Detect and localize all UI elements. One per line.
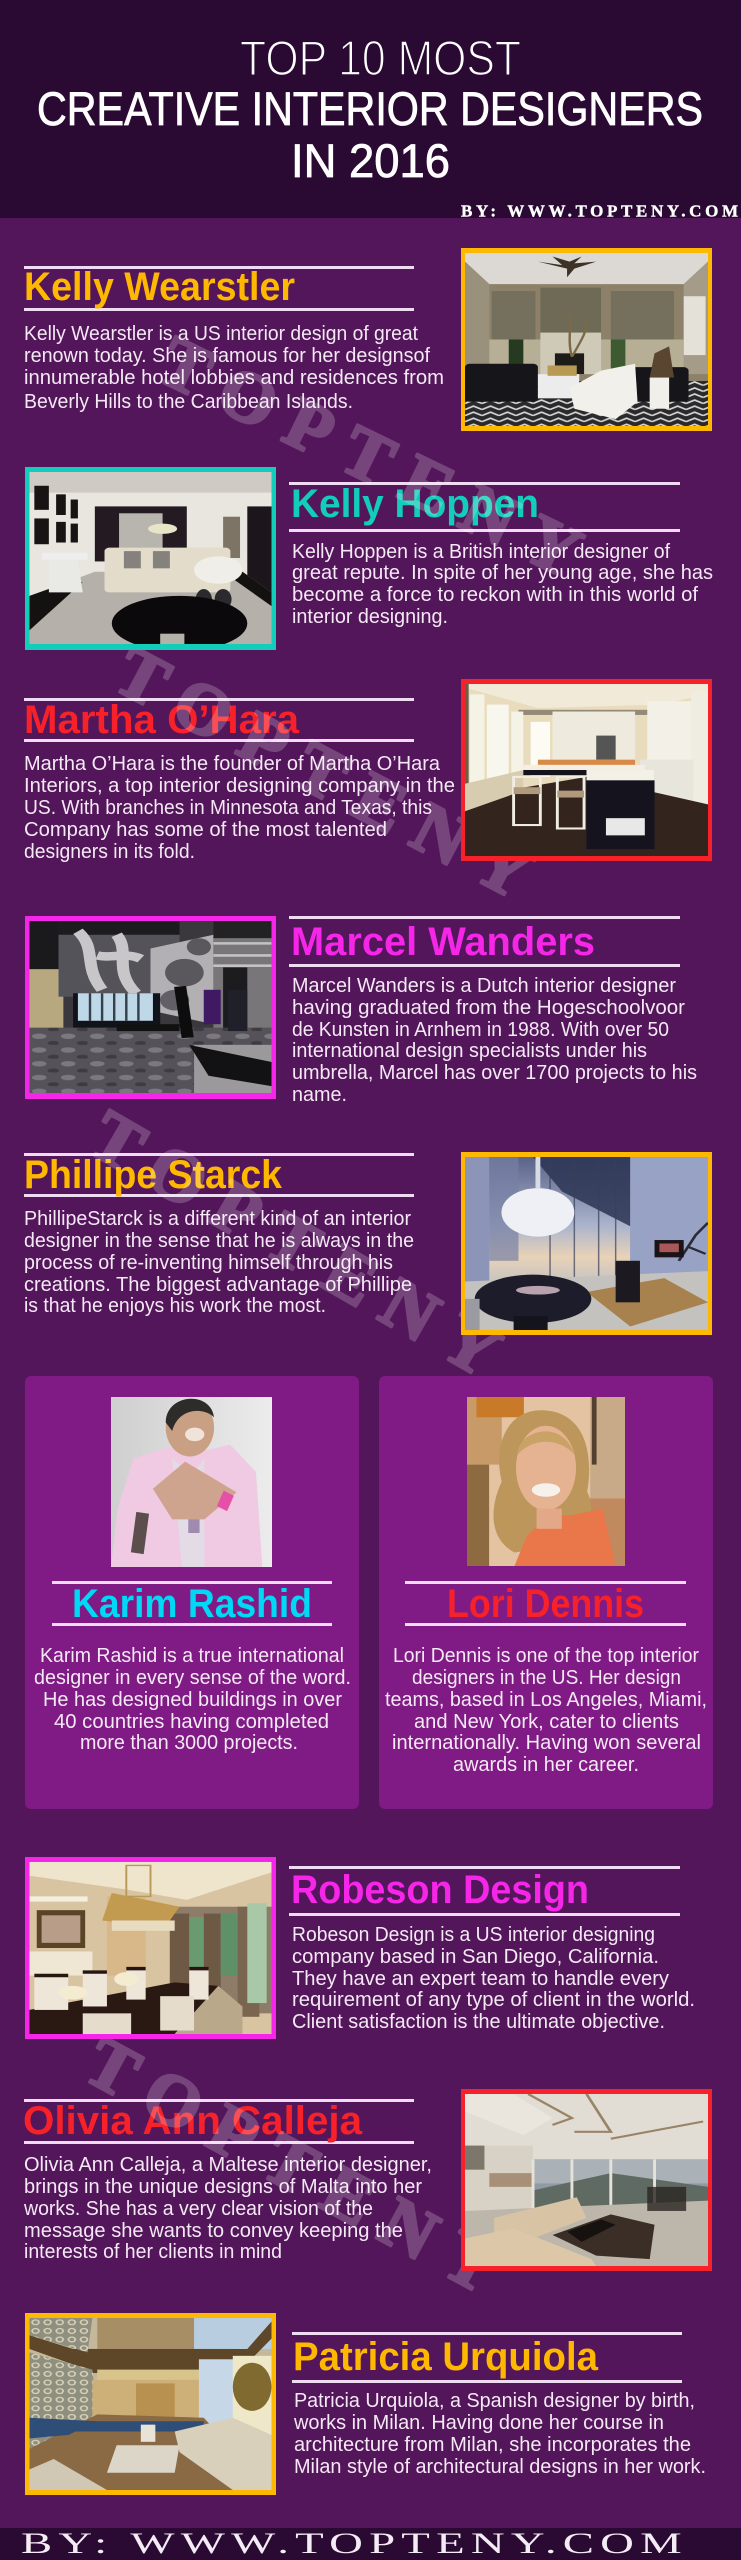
description: more than 3000 projects. [80,1731,298,1754]
description: interior designing. [292,605,448,628]
description: He has designed buildings in over [43,1688,342,1711]
photo: Marcel Wanders boutique [25,916,276,1099]
photo: Martha O'Hara kitchen [461,679,712,861]
entry: Phillipe Starck text [24,1153,414,1317]
entry: Kelly Hoppen text [289,482,713,628]
description: teams, based in Los Angeles, Miami, [385,1688,707,1711]
description [24,322,444,413]
description: works in Milan. Having done her course in [293,2411,664,2434]
description: company based in San Diego, California. [292,1945,659,1968]
description: brings in the unique designs of Malta into her [24,2175,422,2198]
description: Robeson Design is a US interior designing [292,1923,655,1946]
description: US. With branches in Minnesota and Texas, this [24,796,432,819]
entry: Patricia Urquiola text [292,2332,706,2478]
byline: BY: WWW.TOPTENY.COM [461,202,738,220]
description: They have an expert team to handle every [292,1967,670,1990]
description: Kelly Wearstler is a US interior design of great [24,322,418,345]
photo: Kelly Wearstler living room [461,248,712,431]
entry: Martha O'Hara text [24,698,455,863]
description [24,1207,414,1317]
description: renown today. She is famous for her designsof [24,344,430,367]
entry: Kelly Wearstler text [24,265,444,413]
name: Patricia Urquiola [293,2335,599,2379]
name: Martha O’Hara [24,698,300,742]
description: international design specialists under his [292,1039,647,1062]
description: Marcel Wanders is a Dutch interior designer [292,974,676,997]
description: designer in the sense that he is always in the [24,1229,414,1252]
description: Company has some of the most talented [24,818,387,841]
description: Beverly Hills to the Caribbean Islands. [24,390,353,413]
description: designers in the US. Her design [412,1666,681,1689]
description [292,540,713,628]
entry: Olivia Ann Calleja text [23,2099,432,2263]
description: internationally. Having won several [392,1731,701,1754]
name: Marcel Wanders [291,920,595,964]
description: designer in every sense of the word. [34,1666,351,1689]
portrait: Lori Dennis [467,1397,625,1566]
description: innumerable hotel lobbies and residences from [24,366,444,389]
description: is that he enjoys his work the most. [24,1294,326,1317]
name: Kelly Hoppen [291,482,539,526]
description: Olivia Ann Calleja, a Maltese interior designer, [24,2153,432,2176]
photo: Olivia Ann Calleja living room [461,2089,712,2271]
photo: Phillipe Starck dining room [461,1152,712,1335]
description: having graduated from the Hogeschoolvoor [292,996,685,1019]
description [292,1923,695,2033]
title line 3: IN 2016 [291,134,450,187]
description: PhillipeStarck is a different kind of an interior [24,1207,411,1230]
description: process of re-inventing himself through his [24,1251,393,1274]
description: Interiors, a top interior designing company in the [24,774,455,797]
description: Karim Rashid is a true international [40,1644,344,1667]
description: awards in her career. [453,1753,639,1776]
name: Kelly Wearstler [24,265,295,309]
photo: Kelly Hoppen lounge [25,467,276,651]
entry: Marcel Wanders text [289,916,697,1106]
description: Martha O’Hara is the founder of Martha O’Hara [24,752,441,775]
description [23,2153,432,2263]
description: architecture from Milan, she incorporates the [294,2433,691,2456]
description: become a force to reckon with in this world of [292,583,698,606]
description: message she wants to convey keeping the [24,2219,403,2242]
description: de Kunsten in Arnhem in 1988. With over 50 [292,1018,669,1041]
description: requirement of any type of client in the world. [292,1988,695,2011]
photo: Patricia Urquiola lounge [25,2313,276,2495]
name: Phillipe Starck [24,1153,283,1197]
description: Lori Dennis is one of the top interior [393,1644,699,1667]
description: umbrella, Marcel has over 1700 projects to his [292,1061,697,1084]
card: Lori Dennis [379,1376,713,1809]
card: Karim Rashid [25,1376,359,1809]
rules and name: Karim Rashid [72,1582,312,1626]
description: great repute. In spite of her young age, she has [292,561,713,584]
header banner [0,0,741,220]
watermark: TOPTENY 2: TOPTENY [103,630,545,915]
description: works. She has a very clear vision of the [23,2197,373,2220]
description [24,752,455,863]
description: Client satisfaction is the ultimate objective. [292,2010,665,2033]
footer banner [0,2527,741,2560]
footer byline: BY: WWW.TOPTENY.COM [21,2527,688,2560]
photo: Robeson Design dining room [25,1857,276,2039]
description: Milan style of architectural designs in her work. [294,2455,706,2478]
description: 40 countries having completed [54,1710,329,1733]
rules and name: Lori Dennis [447,1582,644,1626]
watermark: TOPTENY 4: TOPTENY [72,2021,513,2310]
name: Robeson Design [291,1868,589,1912]
description: Kelly Hoppen is a British interior designer of [292,540,670,563]
description [34,1644,351,1754]
description: designers in its fold. [24,840,195,863]
title line 1: TOP 10 MOST [240,32,521,86]
description: creations. The biggest advantage of Phillipe [24,1273,412,1296]
name: Olivia Ann Calleja [23,2099,363,2143]
entry: Robeson Design text [289,1866,695,2033]
watermark: TOPTENY 1: TOPTENY [147,320,594,593]
description [385,1644,707,1776]
portrait: Karim Rashid [111,1397,272,1567]
description: and New York, cater to clients [414,1710,679,1733]
watermark: TOPTENY 3: TOPTENY [77,1095,514,1393]
description [292,974,697,1106]
description [293,2389,706,2478]
description: interests of her clients in mind [24,2240,282,2263]
description: name. [292,1083,347,1106]
description: Patricia Urquiola, a Spanish designer by birth, [294,2389,695,2412]
